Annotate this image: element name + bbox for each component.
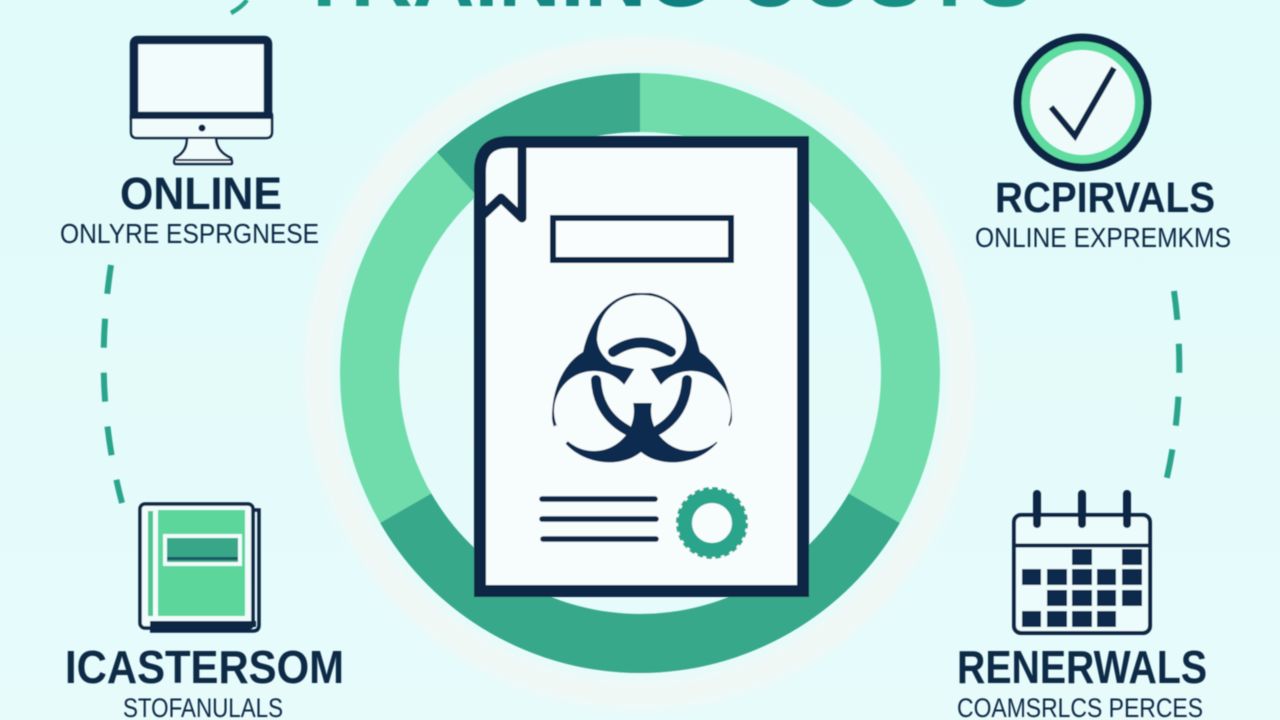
arrow: left dashed connector: [104, 265, 122, 503]
item: approvals: [975, 34, 1231, 253]
document page: [480, 142, 803, 591]
icon: calendar: [1014, 494, 1150, 633]
arrow: title accent tick: [231, 0, 247, 13]
heading: online: ONLINE: [120, 168, 282, 219]
icon: check circle: [1014, 34, 1152, 172]
segment: bottom dark: [380, 494, 900, 673]
heading: renewals: RENERWALS: [957, 641, 1207, 693]
label: online: ONLYRE ESPRGNESE: [60, 218, 319, 249]
icon: monitor: [130, 40, 273, 164]
heading: approvals: RCPIRVALS: [995, 174, 1215, 222]
item: renewals: [957, 494, 1207, 720]
item: classroom: [65, 504, 344, 720]
item: online: [60, 40, 319, 249]
segment: top left dark: [437, 73, 640, 196]
donut chart: [370, 73, 910, 673]
title box: [553, 218, 731, 260]
heading: classroom: ICASTERSOM: [65, 641, 344, 693]
text lines: [542, 499, 656, 539]
icon: biohazard: [552, 293, 732, 462]
document: [480, 142, 803, 591]
halo ring: [318, 51, 962, 695]
bookmark: [484, 142, 522, 218]
segment: light green: [370, 102, 910, 644]
arrow: right dashed connector: [1165, 291, 1179, 486]
icon: manual book: [140, 504, 259, 631]
icon: gear seal: [678, 489, 746, 557]
label: approvals: ONLINE EXPREMKMS: [975, 222, 1231, 253]
